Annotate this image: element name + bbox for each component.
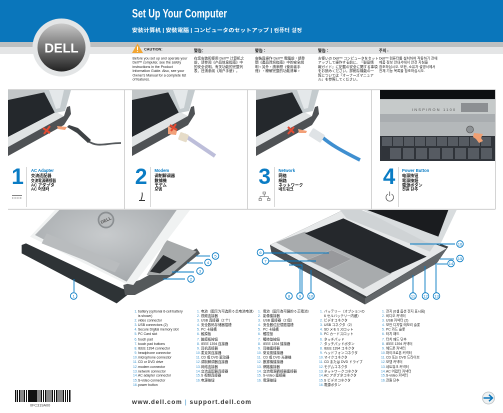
legend: Traditional Chinese: 7. (258, 337, 261, 341)
legend: Japanese: 3. (320, 323, 323, 327)
legend: English: USB connectors (2) (138, 323, 168, 327)
legend: Simplified Chinese: IEEE 1394 连接器 (201, 341, 229, 346)
step number: 4 (383, 164, 396, 189)
legend: Korean: S-video 커넥터 (386, 373, 408, 378)
legend: English: is shown) (138, 314, 152, 318)
step number: 2 (135, 164, 147, 189)
callouts 6-16: 6 (259, 250, 262, 255)
legend: Simplified Chinese: 16. (196, 378, 201, 382)
legend: English: PC Card slot (138, 332, 157, 336)
legend: Simplified Chinese: 1. (197, 310, 200, 314)
step labels (402, 172, 422, 192)
legend: Traditional Chinese: S-video 連接器 (263, 373, 286, 378)
legend: English: CD or DVD drive (138, 360, 163, 364)
legend: English: power button (138, 383, 158, 387)
legend: Japanese: ヘッドフォンコネクタ (324, 350, 358, 355)
legend: Korean: 1. (382, 310, 385, 314)
caution: Simplified Chinese: 的安全说明。有关功能的完整列 (194, 64, 243, 69)
panel: step 2 modem (132, 90, 215, 207)
callouts 6-16: 15 (458, 256, 463, 261)
legend: Japanese: 14. (319, 374, 324, 378)
legend: Simplified Chinese: 7. (197, 337, 200, 341)
illustration: modem cable into laptop (132, 90, 215, 156)
caution: Korean: 제품 정보 안내서에서 안전 지침을 (379, 60, 429, 65)
step heading: Network (278, 168, 296, 173)
caution: Korean: 전체 기능 목록을 참조하십시오. (379, 68, 425, 73)
legend: Japanese: 11. (319, 360, 324, 364)
legend: Korean: 13. (381, 365, 386, 369)
legend: Korean: 12. (381, 360, 386, 364)
legend: Simplified Chinese: 15. (196, 374, 201, 378)
legend: Korean: 2. (382, 314, 385, 318)
icon: Dell logo: DELL (44, 42, 79, 56)
step labels: AC 어댑터 (31, 186, 50, 192)
step labels: 电源按钮 (402, 172, 418, 178)
caution: Simplified Chinese: 在您安装和使用 Dell™ 计算机之 (194, 56, 244, 60)
step heading: Modem (154, 168, 169, 173)
legend: English: Secure Digital memory slot (138, 328, 179, 332)
step labels: ネットワーク (278, 182, 303, 188)
legend: Traditional Chinese: 安全數位記憶體插槽 (263, 322, 294, 327)
legend: Japanese: 1. (320, 310, 323, 314)
caution: Simplified Chinese: 表，还请参阅《用户手册》。 (194, 68, 240, 73)
legend: Traditional Chinese: 1. (258, 310, 261, 314)
icon: power (386, 192, 394, 201)
legend: Traditional Chinese: 11. (257, 356, 262, 360)
legend: Korean: 11. (381, 356, 386, 360)
callouts 1-5: 4 (207, 260, 210, 265)
legend: Japanese: 10. (319, 356, 324, 360)
legend: Traditional Chinese: 觸控墊按鈕 (263, 336, 281, 341)
legend: Simplified Chinese: 电源按钮 (201, 378, 215, 382)
step labels: AC アダプタ (31, 182, 54, 188)
callouts 1-5: 5 (214, 253, 217, 258)
callouts 6-16: 14 (449, 261, 454, 266)
legend: English: 15. (133, 378, 138, 382)
caution: Japanese: 覧については『オーナーズマニュア (318, 72, 374, 77)
legend: English: 9. (134, 351, 137, 355)
callouts 6-16 (257, 241, 463, 299)
legend: Traditional Chinese: CD 或 DVD 光碟機 (263, 354, 292, 360)
legend: Simplified Chinese: S 视频连接器 (201, 373, 222, 378)
legend: English: 3. (134, 323, 137, 327)
legend: English: IEEE 1394 connector (138, 346, 171, 350)
legend: Traditional Chinese: 數據機連接器 (263, 359, 284, 364)
legend: Traditional Chinese: USB 連接器（2 個） (263, 318, 294, 322)
legend: English: 16. (133, 383, 138, 387)
legend: Traditional Chinese: 12. (257, 360, 262, 364)
step labels: モデム (154, 182, 167, 188)
legend: English: microphone connector (138, 356, 172, 360)
step labels (278, 172, 303, 192)
step number: 1 (12, 164, 24, 189)
legend: Japanese (319, 308, 365, 387)
caution: Traditional Chinese (255, 48, 305, 73)
step heading: AC Adapter (31, 168, 54, 173)
caution text: Information Guide. Also, see your (132, 69, 185, 73)
legend: Simplified Chinese: 3. (197, 318, 200, 322)
step number: 3 (258, 164, 271, 189)
legend: English: AC adapter connector (138, 374, 172, 378)
legend: Simplified Chinese: 8. (197, 342, 200, 346)
caution: Korean: 참조하십시오. 또한, 소유자 설명서에서 (379, 64, 435, 69)
legend: English: 5. (134, 332, 137, 336)
legend: English: 2. (134, 318, 137, 322)
legend: Traditional Chinese: 4. (258, 323, 261, 327)
legend: Korean: 터치 패드 (386, 331, 399, 336)
callouts 6-16: 13 (434, 293, 439, 298)
legend: Traditional Chinese: 電源按鈕 (263, 378, 277, 382)
callouts 6-16: 9 (299, 293, 302, 298)
legend: English: 8. (134, 346, 137, 350)
legend: English: 1. (134, 310, 137, 314)
caution: Simplified Chinese: 警告： (194, 48, 206, 53)
legend: Korean: 8. (382, 342, 385, 346)
legend: Korean: 6. (382, 332, 385, 336)
legend: Traditional Chinese: 16. (257, 378, 262, 382)
legend: Simplified Chinese: 14. (196, 370, 201, 374)
legend: Traditional Chinese: 網路連接器 (263, 364, 281, 369)
legend: Korean: 15. (381, 374, 386, 378)
callouts 1-5: 3 (199, 268, 202, 273)
legend: Simplified Chinese: USB 连接器（2 个） (201, 318, 232, 322)
caution: Japanese: 報ガイド』に記載の安全に関する事項 (318, 64, 378, 69)
legend: Simplified Chinese: PC 卡插槽 (201, 327, 217, 332)
laptop back view: DELL (100, 215, 113, 225)
caution: Korean: 주의 : (379, 48, 389, 53)
callouts 6-16: 8 (288, 293, 291, 298)
legend: Simplified Chinese: 4. (197, 323, 200, 327)
callouts 6-16: 7 (264, 258, 267, 263)
icon: network (259, 192, 270, 200)
legend: Korean: 모뎀 커넥터 (386, 359, 403, 364)
legend: Traditional Chinese: 5. (258, 328, 261, 332)
caution: Simplified Chinese: 前，请参阅《产品信息指南》中 (194, 60, 243, 65)
legend: Traditional Chinese: 影像連接器 (263, 313, 281, 318)
legend: Traditional Chinese: 14. (257, 370, 262, 374)
legend: Japanese: USB コネクタ（2） (324, 322, 354, 327)
caution: Japanese: ル』を参照してください。 (318, 76, 360, 82)
legend: Simplified Chinese: 5. (197, 328, 200, 332)
caution text: Owner's Manual for a complete list (132, 73, 186, 77)
legend: Traditional Chinese: IEEE 1394 連接器 (263, 341, 291, 346)
step labels: 모뎀 (154, 186, 162, 192)
callouts 6-16: 11 (411, 293, 416, 298)
caution: Japanese (318, 48, 378, 82)
legend: Korean: 헤드폰 커넥터 (386, 345, 406, 350)
legend: Traditional Chinese: 10. (257, 351, 262, 355)
legend: English: 13. (133, 370, 138, 374)
caution: Korean (379, 48, 438, 73)
icon: AC power (12, 196, 22, 198)
subtitle in four languages: 安装计算机 | 安裝電腦 | コンピュータのセットアップ | 컴퓨터 설정 (132, 26, 302, 34)
caution: Traditional Chinese: 明。另外，請參閱《使用者手 (255, 64, 301, 69)
legend: English: battery (optional 6-cell battery (138, 310, 183, 314)
legend: Japanese: S ビデオコネクタ (324, 378, 351, 382)
step heading: Power Button (402, 168, 430, 173)
legend: Korean: IEEE 1394 커넥터 (386, 341, 413, 346)
caution: Korean: Dell™ 컴퓨터를 설치하여 작동하기 전에 (379, 56, 438, 60)
legend: Traditional Chinese: 麥克風連接器 (263, 350, 284, 355)
legend: Japanese: IEEE 1394 コネクタ (324, 345, 355, 350)
legend: Korean (381, 308, 425, 382)
legend: Traditional Chinese: 電池（圖示為可選的 6 芯電池） (263, 308, 311, 314)
legend: English: touch pad (138, 337, 153, 341)
legend: English: network connector (138, 370, 167, 374)
legend: Japanese: タッチパッドボタン (324, 341, 355, 346)
legend: Korean: 14. (381, 370, 386, 374)
legend: Simplified Chinese: 6. (197, 332, 200, 336)
legend: Traditional Chinese: 8. (258, 342, 261, 346)
legend: Simplified Chinese: CD 或 DVD 驱动器 (201, 354, 230, 360)
legend: Simplified Chinese: 调制解调器连接器 (201, 359, 229, 364)
legend: Japanese: ビデオコネクタ (324, 318, 348, 322)
legend: Korean: USB 커넥터 (2) (386, 318, 408, 322)
legend: Japanese: AC アダプタコネクタ (324, 373, 357, 378)
step labels: 網路 (278, 177, 288, 183)
legend: Simplified Chinese: 13. (196, 365, 201, 369)
legend: English: 14. (133, 374, 138, 378)
laptop back view (22, 210, 219, 303)
legend: Simplified Chinese (196, 308, 256, 382)
legend: Korean: 9. (382, 346, 385, 350)
caution: Japanese: アップして操作する前に、『製品情 (318, 60, 374, 65)
legend: Traditional Chinese (257, 308, 311, 382)
legend: Japanese: 電源ボタン (324, 382, 342, 387)
caution: Japanese: 警告： (318, 48, 330, 53)
legend: English: 12. (133, 365, 138, 369)
legend: Traditional Chinese: 2. (258, 314, 261, 318)
step labels: 電源ボタン (402, 182, 422, 188)
legend: Korean: 5. (382, 328, 385, 332)
title: Set Up Your Computer (132, 6, 227, 20)
panel: step 3 network (256, 90, 360, 207)
legend: Simplified Chinese: 12. (196, 360, 201, 364)
legend: Japanese: 6 セルバッテリー内蔵） (324, 313, 361, 318)
legend: Korean: 전지 (6셀 옵션 전지 표시됨) (386, 308, 425, 314)
legend: Simplified Chinese: 网络连接器 (201, 364, 219, 369)
step labels: 네트워크 (278, 186, 294, 192)
legend: Japanese: 8. (320, 346, 323, 350)
legend: Korean: 3. (382, 318, 385, 322)
step labels: 數據機 (154, 177, 167, 183)
legend: Japanese: 6. (320, 337, 323, 341)
step labels: 调制解调器 (154, 172, 176, 178)
legend: Korean: 네트워크 커넥터 (386, 364, 409, 369)
legend: Simplified Chinese: 电池（图示为可选用 6 芯电池电池） (201, 308, 256, 314)
barcode (15, 390, 70, 408)
legend: English: 4. (134, 328, 137, 332)
legend: Japanese: SD メモリスロット (324, 327, 353, 332)
legend: Korean: 7. (382, 337, 385, 341)
legend: English: 7. (134, 342, 137, 346)
legend: Traditional Chinese: 13. (257, 365, 262, 369)
icon: next arrow (482, 392, 494, 404)
legend: Traditional Chinese: 15. (257, 374, 262, 378)
legend: Simplified Chinese: 10. (196, 351, 201, 355)
legend: English: video connector (138, 318, 163, 322)
legend: English: touch pad buttons (138, 342, 165, 346)
header band (0, 0, 503, 54)
legend: Simplified Chinese: 触摸板 (201, 331, 212, 336)
legend: Simplified Chinese: 触摸板按钮 (201, 336, 219, 341)
step labels: 전원 단추 (402, 186, 418, 192)
illustration: AC adapter into laptop (8, 90, 121, 156)
legend: Japanese: 16. (319, 383, 324, 387)
step labels: 网络 (278, 172, 287, 178)
legend: Simplified Chinese: 11. (196, 356, 201, 360)
caution: Simplified Chinese (194, 48, 244, 73)
illustration: power button photo: INSPIRON 1100 (412, 108, 456, 112)
legend: Japanese: タッチパッド (324, 336, 344, 341)
legend: Japanese: 15. (319, 378, 324, 382)
legend: Korean: 4. (382, 323, 385, 327)
legend: Japanese: 4. (320, 328, 323, 332)
illustration: network cable into laptop (256, 90, 360, 160)
legend: English: headphone connector (138, 351, 172, 355)
legend: Japanese: マイクコネクタ (324, 354, 348, 360)
legend: Simplified Chinese: 安全数码存储器插槽 (201, 322, 232, 327)
legend: Japanese: CD または DVD ドライブ (324, 359, 363, 364)
caution text: Dell™ computer, see the safety (132, 61, 181, 65)
step labels (31, 172, 56, 192)
legend: English: 11. (133, 360, 138, 364)
legend: Japanese: 5. (320, 332, 323, 336)
legend: Japanese: 12. (319, 365, 324, 369)
laptop front view (257, 210, 463, 304)
legend: Traditional Chinese: 3. (258, 318, 261, 322)
legend: Korean: 마이크로폰 커넥터 (386, 350, 412, 355)
caution: Japanese: お使いの Dell™ コンピュータをセット (318, 56, 378, 60)
legend: Japanese: ネットワークコネクタ (324, 368, 358, 374)
legend: Japanese: 9. (320, 351, 323, 355)
footer URLs: www.dell.com | support.dell.com (131, 399, 251, 406)
step panel frame (8, 90, 496, 209)
legend: Japanese: バッテリー（オプションの (324, 308, 365, 314)
legend: Traditional Chinese: 6. (258, 332, 261, 336)
legend: English: 10. (133, 356, 138, 360)
callouts 6-16: 12 (423, 293, 428, 298)
legend: Japanese: 7. (320, 342, 323, 346)
caution: Traditional Chinese: 安裝與操作 Dell™ 電腦前，請參 (255, 56, 305, 60)
legend: Traditional Chinese: 交流電源轉接器連接器 (263, 368, 298, 374)
caution text: instructions in the Product (132, 65, 173, 69)
legend: Japanese: モデムコネクタ (324, 364, 348, 369)
legend: Korean: CD 또는 DVD 드라이브 (386, 354, 420, 360)
legend: Simplified Chinese: 2. (197, 314, 200, 318)
caution text (132, 56, 188, 82)
callouts 6-16: 16 (458, 241, 463, 246)
legend: English: modem connector (138, 365, 166, 369)
callouts 1-5: 2 (190, 276, 193, 281)
step labels: 電源按鈕 (402, 177, 418, 183)
legend: Korean: AC 어댑터 커넥터 (386, 368, 411, 374)
caution: Japanese: をお読みください。詳細な機能の一 (318, 68, 374, 73)
panel: step 4 power button (380, 90, 495, 207)
callouts 1-5: 1 (73, 293, 76, 298)
icon: warning triangle (132, 44, 143, 53)
barcode: 0FC319A00 (30, 404, 50, 408)
icon: Dell logo (32, 18, 90, 76)
caution: English (132, 44, 188, 82)
legend: English (133, 310, 183, 387)
legend: Korean: 전원 단추 (386, 378, 399, 382)
icon: phone (139, 192, 145, 200)
legend: Traditional Chinese: PC 卡插槽 (263, 327, 279, 332)
legend: Simplified Chinese: 9. (197, 346, 200, 350)
panel: step 1 AC adapter (8, 90, 121, 207)
caution: Traditional Chinese: 閱《產品資訊指南》中的安全說 (255, 60, 304, 65)
legend: Korean: 16. (381, 378, 386, 382)
legend: Korean: PC 카드 슬롯 (386, 327, 405, 332)
step labels: 交流電源轉接器 (31, 177, 56, 183)
legend: Japanese: PC カードスロット (324, 331, 353, 336)
callouts 6-16: 10 (309, 293, 314, 298)
legend: Korean: 10. (381, 351, 386, 355)
caution text: Before you set up and operate your (132, 56, 188, 60)
legend: Traditional Chinese: 觸控墊 (263, 331, 274, 336)
step labels: 交流适配器 (31, 172, 52, 178)
callouts 1-5 (70, 253, 219, 299)
legend: Japanese: 2. (320, 318, 323, 322)
caution text: of features. (132, 78, 150, 82)
legend: Traditional Chinese: 耳機連接器 (263, 345, 281, 350)
caution: Traditional Chinese: 警告： (255, 48, 267, 53)
legend: English: S-video connector (138, 378, 166, 382)
legend: Simplified Chinese: 耳机连接器 (201, 345, 219, 350)
step labels (154, 172, 176, 192)
legend: Simplified Chinese: 交流适配器连接器 (201, 368, 229, 374)
legend: Simplified Chinese: 视频连接器 (201, 313, 219, 318)
legend: Traditional Chinese: 9. (258, 346, 261, 350)
caution: Traditional Chinese: 冊》，瞭解完整的功能清單。 (255, 68, 300, 73)
legend: Japanese: 13. (319, 370, 324, 374)
legend: Korean: 터치 패드 단추 (386, 336, 407, 341)
legend: Korean: 보안 디지털 메모리 슬롯 (386, 322, 420, 327)
legend: Simplified Chinese: 麦克风连接器 (201, 350, 222, 355)
legend: English: 6. (134, 337, 137, 341)
caution heading: CAUTION: (144, 48, 163, 52)
legend: Korean: 비디오 커넥터 (386, 313, 406, 318)
